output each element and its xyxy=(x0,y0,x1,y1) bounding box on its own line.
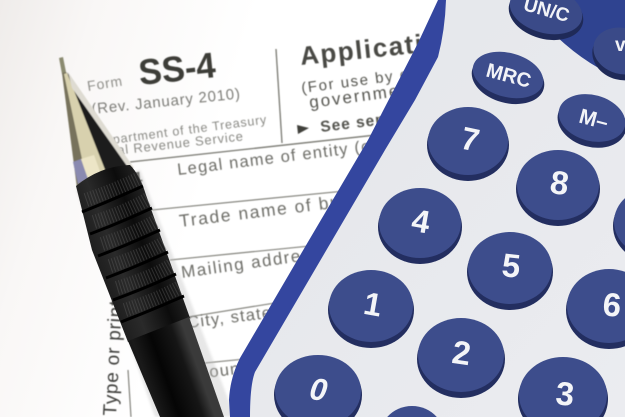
blue display panel corner xyxy=(556,0,625,80)
revision date: (Rev. January 2010) xyxy=(91,85,242,118)
see separate instructions: See separate xyxy=(319,106,428,136)
government text: government agencies xyxy=(308,67,509,112)
key UN/C xyxy=(503,0,589,48)
revenue service line: Internal Revenue Service xyxy=(79,128,244,162)
key 6: 6 xyxy=(601,285,623,324)
key 8 xyxy=(516,150,600,226)
key 1: 1 xyxy=(361,285,385,323)
key 0 xyxy=(274,355,362,417)
line 1 number: 1 xyxy=(134,168,143,185)
key 2 xyxy=(417,318,505,398)
key 5: 5 xyxy=(500,246,522,285)
key decimal partial xyxy=(387,406,437,417)
key 3: 3 xyxy=(554,374,576,413)
pen metal tip xyxy=(59,57,134,188)
calculator xyxy=(229,0,625,417)
calculator blue rim xyxy=(229,0,625,417)
department line: Department of the Treasury xyxy=(95,113,268,149)
key top right xyxy=(587,21,625,87)
calculator body xyxy=(250,0,625,417)
legal name field: Legal name of entity (or xyxy=(176,136,379,179)
key M minus xyxy=(552,87,625,155)
mailing address field: Mailing address xyxy=(180,243,323,282)
form number SS-4: SS-4 xyxy=(137,44,217,93)
type or print vertical text: Type or print xyxy=(100,299,127,416)
key 9 partial xyxy=(613,187,625,263)
key 4 xyxy=(378,188,462,264)
trade name field: Trade name of business xyxy=(178,184,401,231)
city state field: City, state xyxy=(186,304,273,332)
key 3 xyxy=(518,357,608,417)
key 8: 8 xyxy=(548,163,571,202)
pen shadow xyxy=(76,170,235,417)
tax form SS-4 xyxy=(79,24,509,417)
for use by text: (For use by employers xyxy=(300,56,484,97)
key 2: 2 xyxy=(450,333,473,372)
county field: County xyxy=(195,358,257,383)
label Form: Form xyxy=(86,73,124,94)
pen barrel xyxy=(128,317,224,417)
key 6 xyxy=(566,269,625,349)
pen ribbed grip xyxy=(76,165,190,342)
key MRC: MRC xyxy=(484,60,533,93)
key 5 xyxy=(467,232,553,310)
key 7: 7 xyxy=(458,120,483,159)
pen xyxy=(59,57,235,417)
key 4: 4 xyxy=(409,202,433,240)
form rule lines xyxy=(128,49,440,417)
key MRC xyxy=(466,44,550,112)
key 1 xyxy=(328,270,414,348)
key M minus: M– xyxy=(577,105,611,135)
key 7 xyxy=(427,107,509,181)
heading Application: Application xyxy=(298,24,460,71)
key 0: 0 xyxy=(307,371,329,408)
